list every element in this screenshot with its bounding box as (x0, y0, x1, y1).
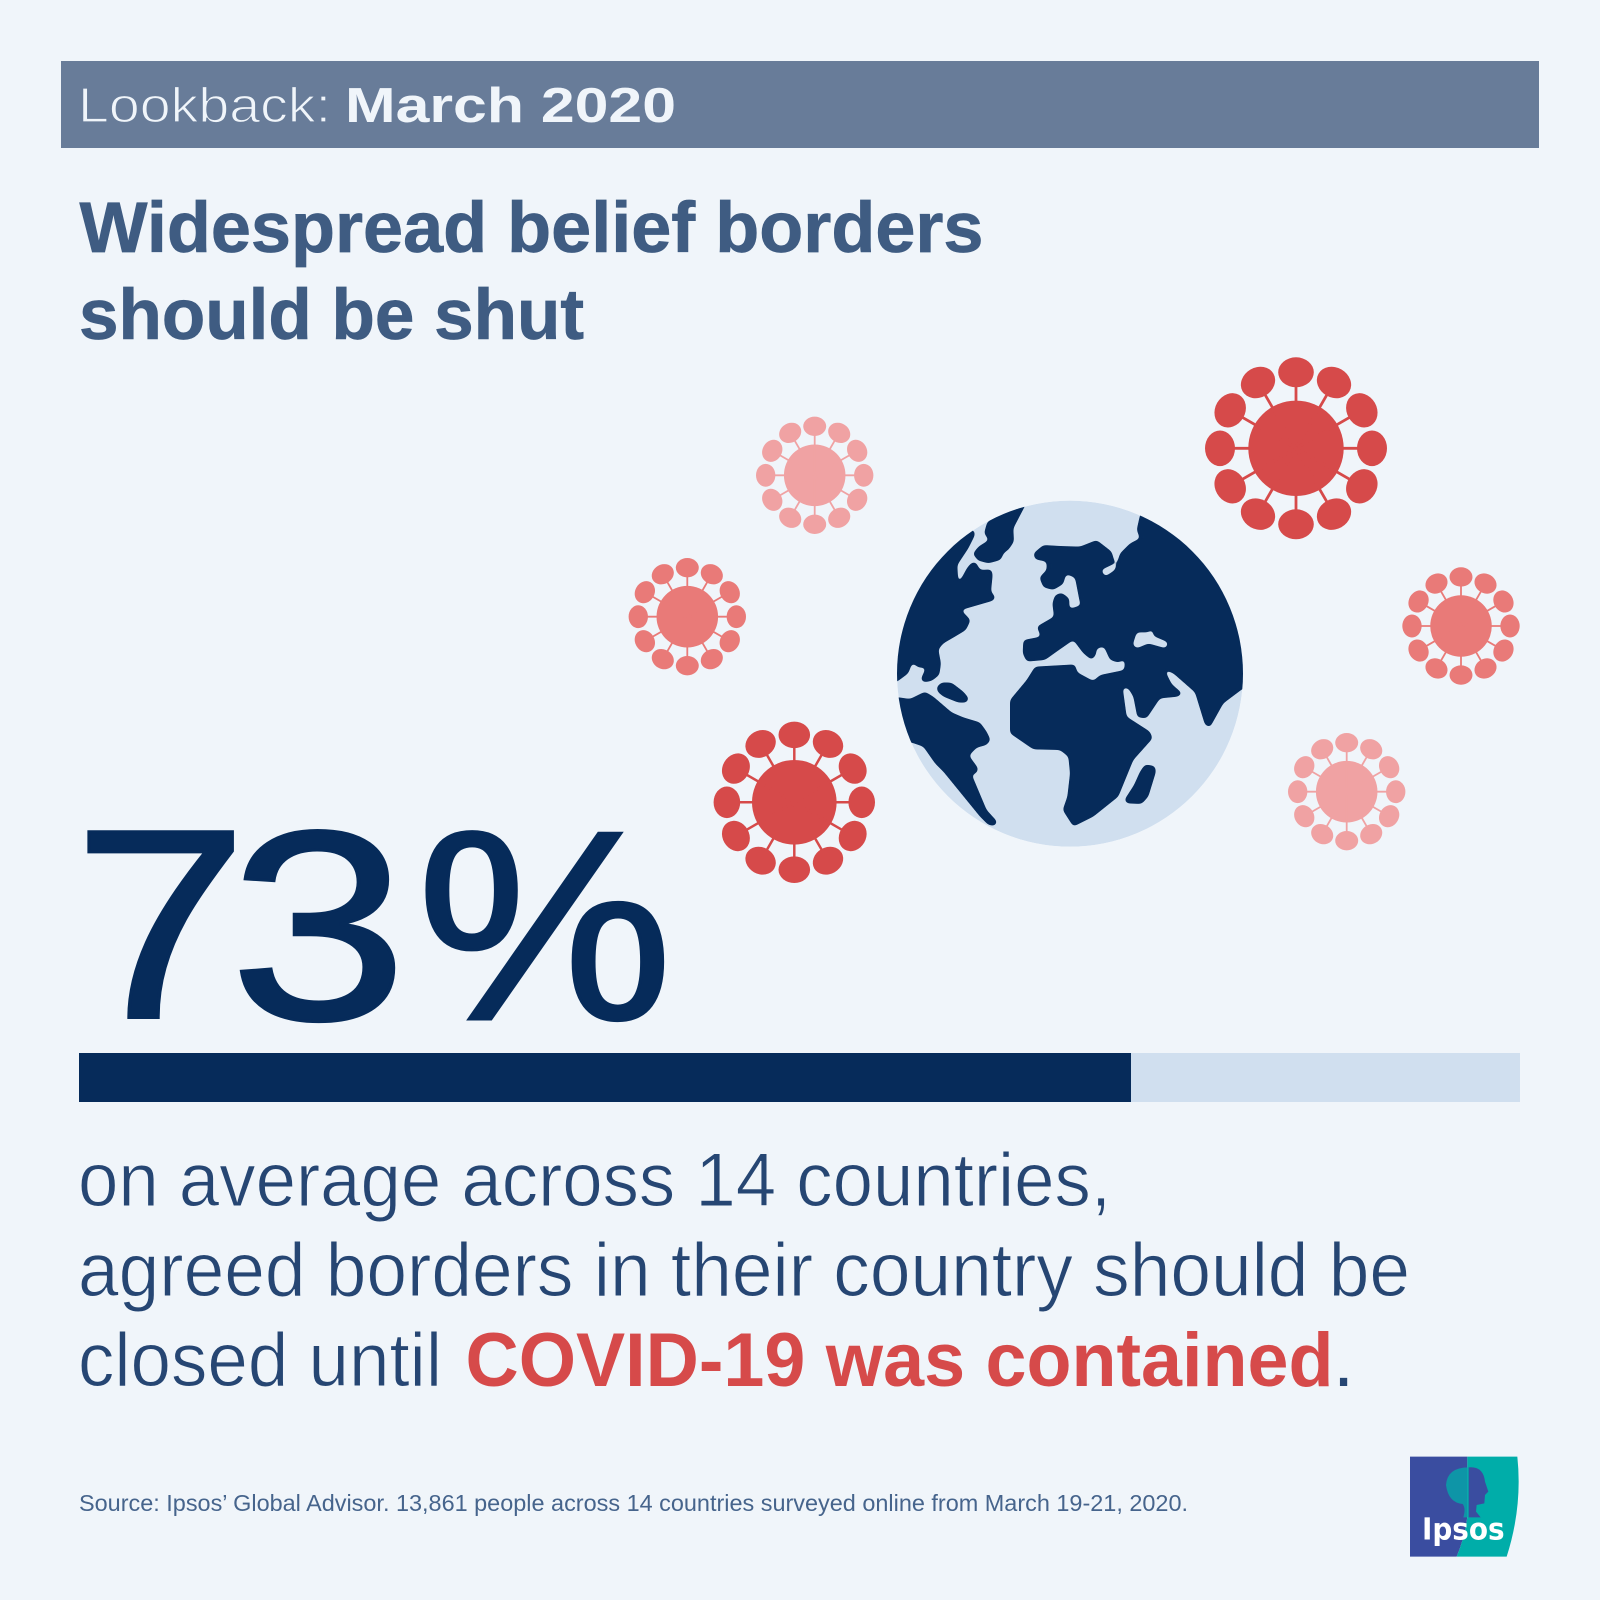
big statistic 73%: % (417, 776, 673, 1077)
body text (78, 1138, 1410, 1403)
logo: Ipsos: Ipsos (1422, 1512, 1505, 1547)
header banner: March 2020 (345, 79, 676, 133)
icon: virus red bottom (714, 722, 875, 883)
caspian sea (1134, 631, 1168, 648)
body text: agreed borders in their country should be (78, 1228, 1410, 1313)
icon: virus salmon right (1402, 567, 1520, 685)
icon: globe (887, 493, 1253, 847)
title: Widespread belief borders (80, 189, 984, 268)
body text: on average across 14 countries, (78, 1138, 1111, 1223)
big statistic 73%: 7 (73, 774, 248, 1076)
icon: virus pink bottom right (1288, 733, 1405, 850)
header banner (61, 61, 1539, 148)
body text: COVID-19 was contained (466, 1318, 1334, 1403)
title (79, 189, 984, 355)
icon: virus pink top (756, 417, 873, 534)
body text: closed until (78, 1318, 442, 1403)
source note: Source: Ipsos’ Global Advisor. 13,861 people across 14 countries surveyed online from March 19-21, 2020. (79, 1490, 1188, 1516)
logo: Ipsos (1410, 1457, 1519, 1557)
body text: . (1333, 1318, 1354, 1403)
big statistic 73% (73, 774, 673, 1077)
big statistic 73%: 3 (230, 776, 408, 1077)
header banner: Lookback: (78, 79, 331, 133)
icon: virus salmon left (629, 558, 746, 675)
title: should be shut (79, 276, 584, 355)
icon: virus large red top right (1205, 357, 1387, 539)
progress bar 73% (79, 1053, 1520, 1102)
